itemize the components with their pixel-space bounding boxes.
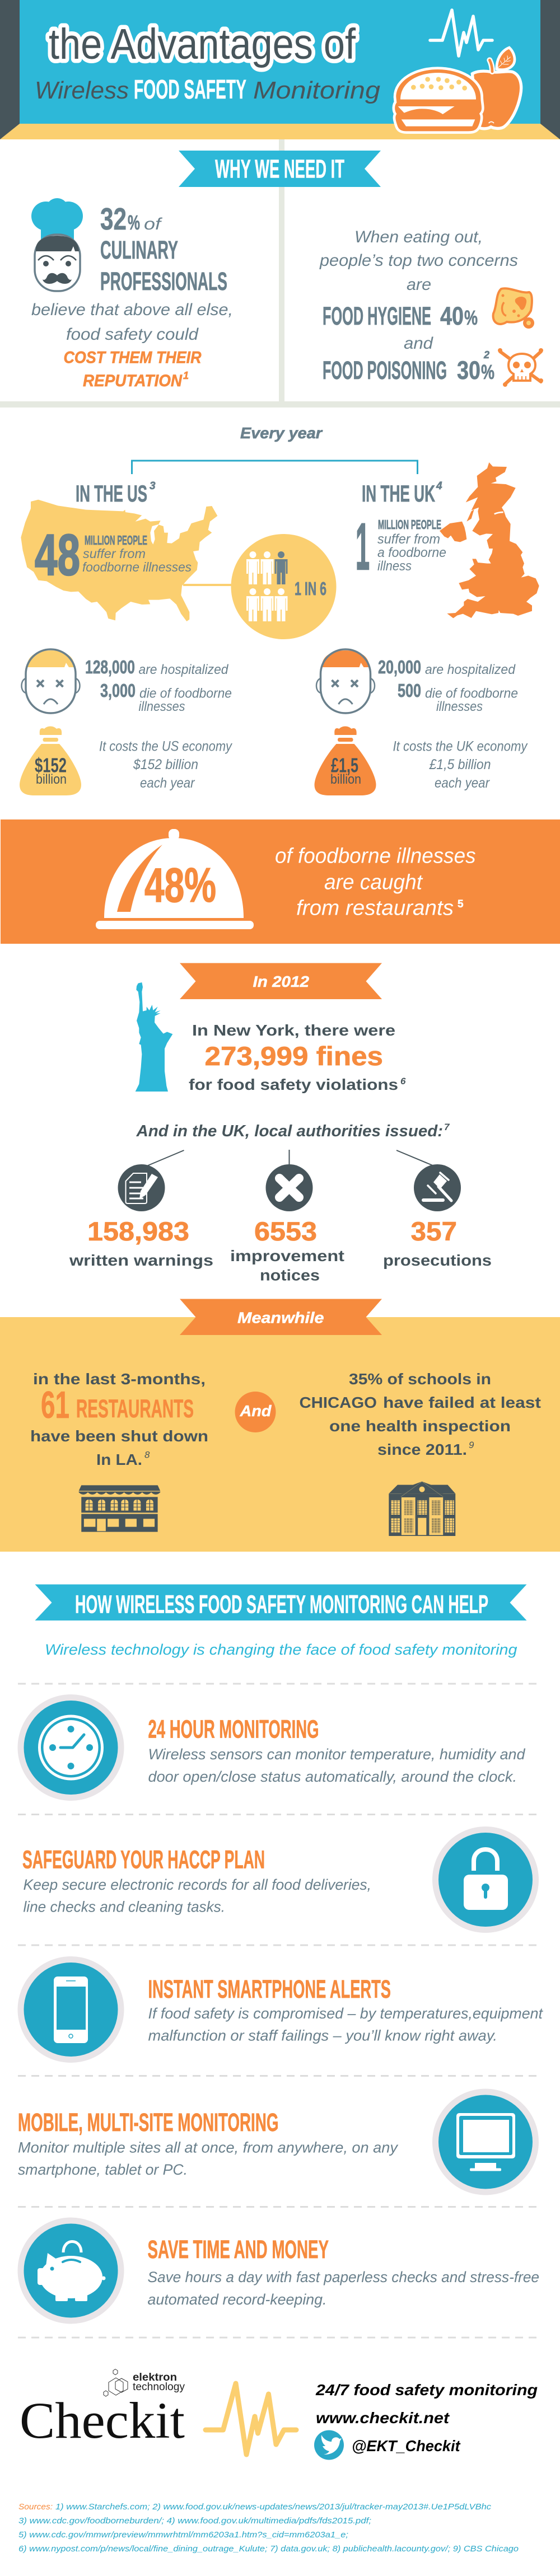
feature: instant smartphone alerts: If food safety is compromised – by temperatures,equipment: [148, 2005, 543, 2022]
contact: website: www.checkit.net: [316, 2409, 450, 2427]
ribbon: meanwhile: [180, 1299, 382, 1335]
section: why we need it: [0, 139, 560, 408]
stat: 1 million people: suffer from: [377, 532, 440, 547]
logo: elektron technology: elektron: [133, 2372, 177, 2383]
stat: 1 million people: [356, 510, 446, 584]
text: New York fines: [189, 1022, 406, 1093]
text: US economy cost: [99, 739, 232, 791]
icon: US money bag: billion: [36, 772, 67, 787]
icon: UK sick face: [316, 649, 375, 713]
heading: UK local authorities: And in the UK, local authorities issued:: [136, 1122, 443, 1140]
stat: top two concerns: 30: [457, 356, 480, 385]
icon: written warning: [118, 1164, 165, 1211]
text: LA restaurants: 61: [41, 1384, 69, 1426]
bracket connector: [132, 461, 418, 474]
stat: top two concerns: are: [407, 275, 431, 294]
stat: 48 million people: foodborne illnesses: [82, 560, 192, 574]
stat: 48%: 48%: [144, 859, 216, 912]
icon: twitter: [314, 2430, 344, 2460]
contact: twitter handle: @EKT_Checkit: [352, 2437, 461, 2455]
section: every year: [20, 424, 539, 795]
text: New York fines: 6: [400, 1076, 406, 1086]
text: Chicago schools: CHICAGO: [299, 1394, 377, 1411]
stat: 32% of culinary professionals: %: [128, 211, 140, 234]
icon: school building: [389, 1482, 455, 1536]
text: caught from restaurants: are caught: [324, 871, 423, 894]
text: US economy cost: $152 billion: [133, 757, 198, 772]
feature: instant smartphone alerts: malfunction or staff failings – you’ll know right away.: [148, 2027, 497, 2044]
stat: written warnings: [69, 1216, 213, 1269]
text: UK economy cost: £1,5 billion: [429, 757, 491, 772]
stat: top two concerns: FOOD HYGIENE: [323, 302, 431, 330]
ribbon: in 2012: In 2012: [253, 973, 309, 990]
heading: every year: Every year: [240, 424, 323, 442]
sources: 3) www.cdc.gov/foodborneburden/; 4) www.food.gov.uk/multimedia/pdfs/fds2015.pdf;: [18, 2516, 371, 2526]
stat: improvement notices: 6553: [254, 1216, 317, 1246]
stat: 32% of culinary professionals: 1: [183, 370, 189, 381]
text: caught from restaurants: [275, 844, 476, 920]
stat: improvement notices: notices: [260, 1266, 320, 1284]
stat: 1 million people: a foodborne: [377, 545, 446, 560]
stat: top two concerns: and: [404, 334, 433, 353]
stat: top two concerns: %: [464, 306, 478, 329]
stat: 1 million people: 1: [356, 510, 370, 584]
dashed separators: [18, 1684, 540, 2338]
stat: written warnings: 158,983: [87, 1216, 189, 1246]
icon: heartbeat: [430, 10, 492, 56]
text: caught from restaurants: 5: [458, 898, 464, 910]
feature: 24 hour monitoring: Wireless sensors can monitor temperature, humidity and: [148, 1746, 525, 1763]
feature: mobile multi-site monitoring: [18, 2089, 539, 2195]
label: 1 in 6: 1 IN 6: [295, 578, 326, 599]
sources: [18, 2502, 519, 2554]
title line 2: [35, 75, 381, 105]
feature: save time and money: Save hours a day with fast paperless checks and stress-free: [148, 2269, 539, 2285]
ribbon: in 2012: [180, 963, 382, 999]
heading: in the US: [76, 480, 156, 507]
icon: UK money bag: billion: [330, 772, 361, 787]
intro text: Wireless technology is changing the face of food safety monitoring: [45, 1641, 517, 1658]
stat: prosecutions: [383, 1216, 492, 1269]
stat: improvement notices: [230, 1216, 344, 1284]
stat: 32% of culinary professionals: PROFESSIONALS: [100, 267, 227, 296]
logo: elektron technology: [104, 2369, 185, 2396]
header banner: [0, 0, 560, 139]
text: Chicago schools: 35% of schools in: [349, 1370, 491, 1388]
icon: skull: [498, 348, 543, 387]
text: Chicago schools: [299, 1370, 541, 1458]
stat: top two concerns: %: [481, 360, 494, 383]
contact: tagline: 24/7 food safety monitoring: [315, 2381, 538, 2399]
feature: mobile multi-site monitoring: MOBILE, MULTI-SITE MONITORING: [18, 2108, 279, 2137]
logo: Checkit: Checkit: [20, 2392, 185, 2449]
stat: 32% of culinary professionals: CULINARY: [100, 236, 178, 264]
section: how wireless monitoring can help: [18, 1584, 543, 2338]
sources: 6) www.nypost.com/p/news/local/fine_dining_outrage_Kulute; 7) data.gov.uk; 8) publichealth.lacounty.gov/; 9) CBS Chicago: [18, 2544, 519, 2554]
text: LA restaurants: 8: [144, 1450, 150, 1460]
icon: clock: [18, 1694, 124, 1801]
icon: gavel: [414, 1164, 461, 1211]
feature: safeguard HACCP plan: SAFEGUARD YOUR HACCP PLAN: [22, 1845, 265, 1874]
stat: 1 million people: illness: [377, 559, 412, 574]
feature: save time and money: [18, 2218, 539, 2324]
stat: UK hospitalised and deaths: 20,000: [378, 657, 421, 677]
panel: 48% restaurants band: [1, 819, 560, 944]
stat: UK hospitalised and deaths: are hospitalized: [425, 662, 516, 677]
text: UK economy cost: each year: [435, 775, 490, 791]
map: USA: [21, 500, 217, 621]
icon: improvement notice cross: [265, 1164, 312, 1211]
icon: cloche: [96, 829, 254, 929]
stat: US hospitalised and deaths: 3,000: [100, 680, 136, 701]
icon: US money bag: $152: [35, 753, 67, 777]
title line 2: Monitoring: [253, 77, 381, 104]
feature: 24 hour monitoring: 24 HOUR MONITORING: [148, 1715, 319, 1743]
stat: 32% of culinary professionals: [31, 202, 233, 390]
icon: US money bag: [20, 727, 81, 795]
heading: in the UK: 4: [436, 480, 442, 492]
stat: written warnings: written warnings: [69, 1252, 213, 1269]
stat: UK hospitalised and deaths: [378, 657, 518, 714]
badge: and: And: [239, 1402, 272, 1420]
text: LA restaurants: RESTAURANTS: [76, 1394, 194, 1423]
icon: smartphone: [18, 1956, 124, 2063]
stat: 32% of culinary professionals: believe that above all else,: [31, 301, 233, 319]
stat: US hospitalised and deaths: illnesses: [139, 699, 185, 714]
icon: padlock: [432, 1826, 539, 1933]
stat: UK hospitalised and deaths: illnesses: [436, 699, 483, 714]
feature: mobile multi-site monitoring: smartphone, tablet or PC.: [18, 2161, 188, 2178]
text: New York fines: In New York, there were: [192, 1022, 395, 1039]
text: New York fines: 273,999 fines: [205, 1041, 383, 1071]
stat: top two concerns: [319, 228, 518, 385]
icon: chef: [31, 198, 83, 291]
text: LA restaurants: have been shut down: [30, 1427, 208, 1445]
stat: 48 million people: MILLION PEOPLE: [85, 533, 147, 547]
icon: statue of liberty: [136, 982, 172, 1092]
connector line: [183, 584, 234, 586]
stat: 32% of culinary professionals: REPUTATION: [83, 372, 183, 390]
stat: prosecutions: prosecutions: [383, 1252, 492, 1269]
text: caught from restaurants: of foodborne illnesses: [275, 844, 476, 868]
heading: in the US: 3: [150, 480, 156, 492]
stat: 1 million people: MILLION PEOPLE: [378, 517, 441, 532]
text: New York fines: for food safety violations: [189, 1076, 398, 1093]
sources: 1) www.Starchefs.com; 2) www.food.gov.uk/news-updates/news/2013/jul/tracker-may2013#.Ue1P5dLVBhc: [55, 2502, 492, 2512]
feature: save time and money: automated record-keeping.: [148, 2291, 327, 2308]
badge: and: [235, 1392, 276, 1432]
feature: save time and money: SAVE TIME AND MONEY: [148, 2235, 329, 2264]
stat: prosecutions: 357: [411, 1216, 457, 1246]
sources: 5) www.cdc.gov/mmwr/preview/mmwrhtml/mm6203a1.htm?s_cid=mm6203a1_e;: [18, 2530, 348, 2540]
ribbon heading: WHY WE NEED IT: [215, 154, 344, 184]
feature: safeguard HACCP plan: Keep secure electronic records for all food deliveries,: [24, 1876, 371, 1893]
stat: UK hospitalised and deaths: die of foodborne: [425, 686, 518, 701]
feature: instant smartphone alerts: [18, 1956, 543, 2063]
heading: in the US: IN THE US: [76, 480, 147, 507]
icon: heartbeat: [206, 2383, 296, 2455]
stat: top two concerns: When eating out,: [354, 228, 483, 246]
icon: UK money bag: £1,5: [331, 753, 358, 777]
footer: logos and contact: [18, 2369, 538, 2554]
icon: restaurant building: [79, 1485, 160, 1532]
stat: top two concerns: FOOD POISONING: [323, 356, 447, 385]
stat: top two concerns: people’s top two concerns: [319, 251, 518, 270]
ribbon heading: [179, 151, 381, 187]
stat: 48 million people: 48: [35, 523, 80, 588]
title line 1: the Advantages of: [49, 20, 356, 68]
feature: safeguard HACCP plan: [22, 1826, 539, 1933]
stat: US hospitalised and deaths: 128,000: [85, 657, 135, 677]
text: Chicago schools: have failed at least: [383, 1394, 541, 1411]
text: UK economy cost: It costs the UK economy: [393, 739, 528, 755]
stat: UK hospitalised and deaths: 500: [398, 680, 421, 701]
stat: top two concerns: 2: [483, 349, 489, 360]
stat: 48 million people: [35, 523, 192, 588]
feature: 24 hour monitoring: [18, 1694, 525, 1801]
sources: Sources:: [18, 2502, 53, 2512]
text: LA restaurants: in the last 3-months,: [33, 1370, 206, 1388]
stat: 32% of culinary professionals: 32: [100, 202, 127, 236]
heading: in the UK: [362, 480, 442, 507]
text: caught from restaurants: from restaurants: [296, 897, 454, 920]
connector lines: [147, 1150, 434, 1167]
icon: US sick face: [21, 649, 80, 713]
stat: 48 million people: suffer from: [83, 546, 146, 561]
feature: mobile multi-site monitoring: Monitor multiple sites all at once, from anywhere, on any: [18, 2139, 398, 2156]
stat: US hospitalised and deaths: [85, 657, 232, 714]
text: Chicago schools: since 2011.: [377, 1441, 467, 1458]
icon: burger and apple: [395, 48, 521, 131]
icon: germ: [493, 288, 534, 329]
text: LA restaurants: [30, 1370, 208, 1468]
feature: safeguard HACCP plan: line checks and cleaning tasks.: [24, 1899, 225, 1915]
stat: 32% of culinary professionals: food safety could: [66, 325, 199, 344]
ribbon heading: [35, 1584, 526, 1620]
icon: UK money bag: [315, 727, 376, 795]
text: LA restaurants: In LA.: [96, 1451, 142, 1468]
heading: in the UK: IN THE UK: [362, 480, 435, 507]
people pictogram: [246, 551, 288, 621]
stat: top two concerns: 40: [440, 302, 464, 330]
1 in 6 circle: [231, 534, 336, 639]
panel: meanwhile: [0, 1299, 560, 1552]
feature: 24 hour monitoring: door open/close status automatically, around the clock.: [148, 1768, 517, 1785]
section: in 2012: [69, 963, 492, 1284]
feature: instant smartphone alerts: INSTANT SMARTPHONE ALERTS: [148, 1975, 391, 2003]
stat: US hospitalised and deaths: are hospitalized: [139, 662, 228, 677]
text: UK economy cost: [393, 739, 528, 791]
icon: piggy bank: [18, 2218, 124, 2324]
text: Chicago schools: 9: [469, 1440, 474, 1450]
text: Chicago schools: one health inspection: [329, 1417, 511, 1435]
stat: 32% of culinary professionals: of: [144, 215, 162, 233]
map: UK: [440, 462, 539, 618]
heading: UK local authorities: 7: [444, 1122, 450, 1132]
ribbon: meanwhile: Meanwhile: [237, 1309, 324, 1327]
stat: US hospitalised and deaths: die of foodborne: [139, 686, 232, 701]
logo: elektron technology: technology: [133, 2381, 185, 2393]
text: US economy cost: It costs the US economy: [99, 739, 232, 755]
icon: monitor: [432, 2089, 539, 2195]
stat: improvement notices: improvement: [230, 1247, 344, 1264]
title line 2: Wireless: [35, 77, 129, 104]
stat: 32% of culinary professionals: COST THEM THEIR: [64, 348, 202, 367]
title line 2: FOOD SAFETY: [134, 75, 246, 105]
text: US economy cost: each year: [140, 775, 195, 791]
